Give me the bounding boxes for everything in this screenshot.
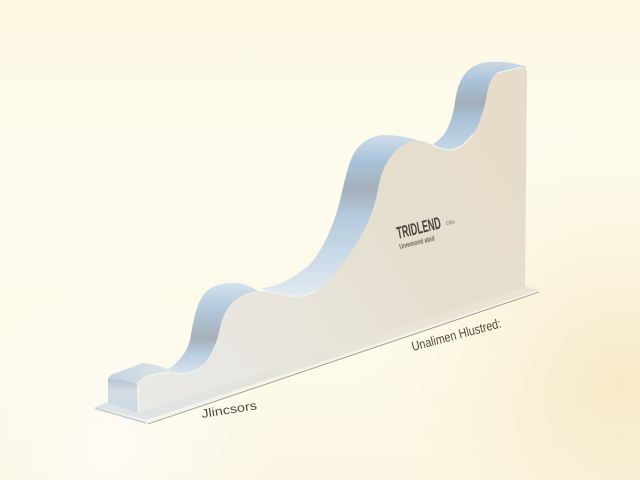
dimension label right: Unalimen Hlustred: <box>410 316 503 354</box>
extruded profile <box>108 62 527 413</box>
face title <box>395 213 456 251</box>
highlight along front edge <box>138 67 522 412</box>
end block side <box>108 379 138 413</box>
curved band: middle <box>260 135 417 296</box>
curved band: upper <box>433 62 527 150</box>
face title: cto <box>445 219 456 227</box>
curved band: lower <box>165 283 258 374</box>
face title: TRIDLEND <box>395 213 442 243</box>
base plate <box>95 286 539 424</box>
face title: Unmmond abid <box>399 235 435 251</box>
end block top <box>108 363 173 384</box>
front face <box>137 67 527 413</box>
dimension label left: Jlincsors <box>200 398 258 421</box>
